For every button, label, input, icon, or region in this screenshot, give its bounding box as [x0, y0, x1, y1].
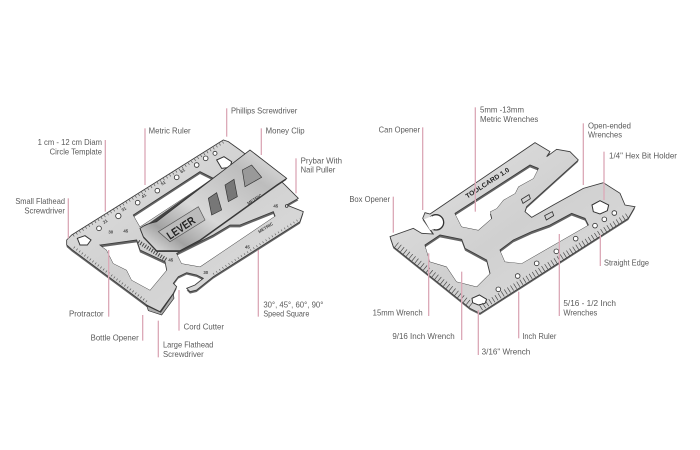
illustration: front card with money clip: 51: [160, 179, 167, 187]
label: Inch Wrenches: Wrenches: [563, 307, 597, 317]
label: Straight Edge: [600, 235, 649, 267]
illustration: front card with money clip: 45: [273, 203, 279, 208]
illustration: front card with money clip: 45: [245, 244, 250, 249]
label: Large Flathead Screwdriver: Screwdriver: [163, 349, 204, 359]
illustration: front card with money clip: [67, 140, 303, 315]
money clip: [140, 150, 287, 252]
label: Can Opener: Can Opener: [379, 125, 420, 135]
label: Phillips Screwdriver: [227, 105, 298, 137]
label: Small Flathead Screwdriver: Small Flathead: [15, 196, 65, 206]
panel: front of tool card: [15, 105, 342, 359]
label: Small Flathead Screwdriver: [15, 196, 68, 238]
label: Metric Wrenches: Metric Wrenches: [480, 114, 538, 124]
label: Inch Ruler: Inch Ruler: [522, 331, 557, 341]
illustration: front card with money clip: 30: [108, 229, 114, 234]
label: Metric Ruler: Metric Ruler: [149, 125, 191, 135]
illustration: front card with money clip: METRIC: [246, 193, 263, 206]
label: Can Opener: [379, 125, 423, 210]
label: Metric Wrenches: 5mm -13mm: [480, 105, 524, 115]
label: Straight Edge: Straight Edge: [604, 257, 649, 267]
label: Prybar With Nail Puller: Prybar With: [301, 155, 342, 165]
illustration: front card with money clip: METRIC: [257, 221, 274, 234]
label: 15mm Wrench: 15mm Wrench: [373, 307, 423, 317]
label: Bottle Opener: Bottle Opener: [91, 333, 139, 343]
illustration: front card with money clip: 45: [168, 258, 174, 263]
label: Protractor: [69, 250, 109, 319]
label: Money Clip: Money Clip: [266, 125, 305, 135]
illustration: front card with money clip: 21: [102, 218, 109, 225]
illustration: front card with money clip: 61: [179, 167, 186, 174]
panel: back of tool card: [349, 105, 677, 357]
label: 3/16 Wrench: 3/16" Wrench: [482, 347, 531, 357]
label: Speed Square: Speed Square: [263, 309, 310, 319]
label: Cord Cutter: Cord Cutter: [184, 321, 224, 331]
label: circle template: Circle Template: [50, 146, 102, 156]
illustration: front card with money clip: 30: [203, 270, 209, 275]
label: Prybar With Nail Puller: Nail Puller: [301, 165, 336, 175]
label: Cord Cutter: [179, 290, 224, 331]
label: Metric Wrenches: [475, 105, 538, 212]
illustration: front card with money clip: 45: [123, 229, 129, 234]
label: Small Flathead Screwdriver: Screwdriver: [24, 205, 65, 215]
label: Open-ended Wrenches: Wrenches: [588, 130, 622, 140]
label: Metric Ruler: [145, 125, 191, 185]
label: Prybar With Nail Puller: [296, 155, 342, 193]
label: Inch Wrenches: 5/16 - 1/2 Inch: [563, 298, 616, 308]
label: Money Clip: [261, 125, 305, 155]
label: Speed Square: 30°, 45°, 60°, 90°: [263, 299, 323, 309]
label: Box Opener: Box Opener: [349, 194, 390, 204]
illustration: front card with money clip: 41: [140, 192, 148, 199]
label: Inch Wrenches: [559, 234, 616, 317]
label: Protractor: Protractor: [69, 309, 104, 319]
label: Phillips Screwdriver: Phillips Screwdriver: [231, 105, 298, 115]
label: Inch Ruler: [519, 292, 557, 341]
label: Hex Bit Holder: [604, 151, 677, 200]
label: 9/16 Inch Wrench: 9/16 Inch Wrench: [392, 331, 455, 341]
label: circle template: 1 cm - 12 cm Diam: [38, 137, 102, 147]
label: Large Flathead Screwdriver: Large Flathead: [163, 340, 214, 350]
label: 15mm Wrench: [373, 253, 429, 317]
label: Speed Square: [258, 250, 323, 319]
label: circle template: [38, 137, 105, 212]
illustration: front card with money clip: 31: [120, 205, 128, 213]
label: Bottle Opener: [91, 315, 143, 343]
illustration: back card: [390, 143, 635, 315]
label: Open-ended Wrenches: [583, 120, 631, 185]
label: Large Flathead Screwdriver: [158, 321, 214, 359]
label: 9/16 Inch Wrench: [392, 272, 462, 341]
label: Open-ended Wrenches: Open-ended: [588, 120, 631, 130]
infographic canvas: [16, 106, 677, 358]
label: Hex Bit Holder: 1/4" Hex Bit Holder: [609, 151, 677, 161]
label: 3/16 Wrench: [478, 310, 531, 357]
clip logo: LEVER: [165, 215, 198, 242]
engraved card name: TOOLCARD 1.0: [465, 167, 511, 200]
label: Box Opener: [349, 194, 393, 233]
